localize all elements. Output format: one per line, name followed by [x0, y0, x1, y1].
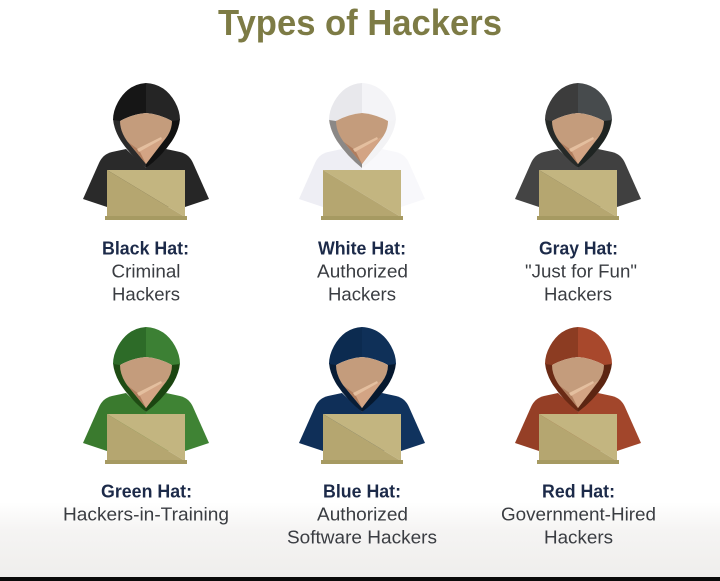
label: red hat: Government-Hired — [501, 504, 656, 524]
card: red hat — [501, 327, 656, 548]
label: black hat: Criminal — [112, 262, 180, 282]
label: white hat: Authorized — [317, 262, 408, 282]
label: gray hat: Gray Hat: — [539, 238, 618, 258]
label: white hat: White Hat: — [318, 238, 406, 258]
label: gray hat — [525, 238, 637, 304]
label: black hat: Black Hat: — [102, 238, 189, 258]
title: Types of Hackers — [218, 2, 502, 43]
icon: green hat hacker — [83, 327, 209, 464]
label: black hat: Hackers — [112, 284, 180, 304]
label: red hat: Hackers — [544, 528, 613, 548]
label: blue hat: Software Hackers — [287, 528, 437, 548]
icon: black hat hacker — [83, 83, 209, 220]
card: white hat — [299, 83, 425, 304]
card: gray hat — [515, 83, 641, 304]
label: green hat: Hackers-in-Training — [63, 504, 229, 524]
label: green hat: Green Hat: — [101, 482, 192, 502]
icon: white hat hacker — [299, 83, 425, 220]
label: gray hat: Hackers — [544, 284, 612, 304]
label: blue hat: Authorized — [317, 504, 408, 524]
label: black hat — [102, 238, 189, 304]
icon: blue hat hacker — [299, 327, 425, 464]
label: blue hat: Blue Hat: — [323, 482, 401, 502]
label: blue hat — [287, 482, 437, 548]
label: green hat — [63, 482, 229, 524]
label: white hat — [317, 238, 408, 304]
label: red hat: Red Hat: — [542, 482, 615, 502]
label: red hat — [501, 482, 656, 548]
card: blue hat — [287, 327, 437, 548]
label: white hat: Hackers — [328, 284, 396, 304]
card: black hat — [83, 83, 209, 304]
icon: gray hat hacker — [515, 83, 641, 220]
card: green hat — [63, 327, 229, 524]
label: gray hat: "Just for Fun" — [525, 262, 637, 282]
icon: red hat hacker — [515, 327, 641, 464]
bottom black bar — [0, 577, 720, 581]
